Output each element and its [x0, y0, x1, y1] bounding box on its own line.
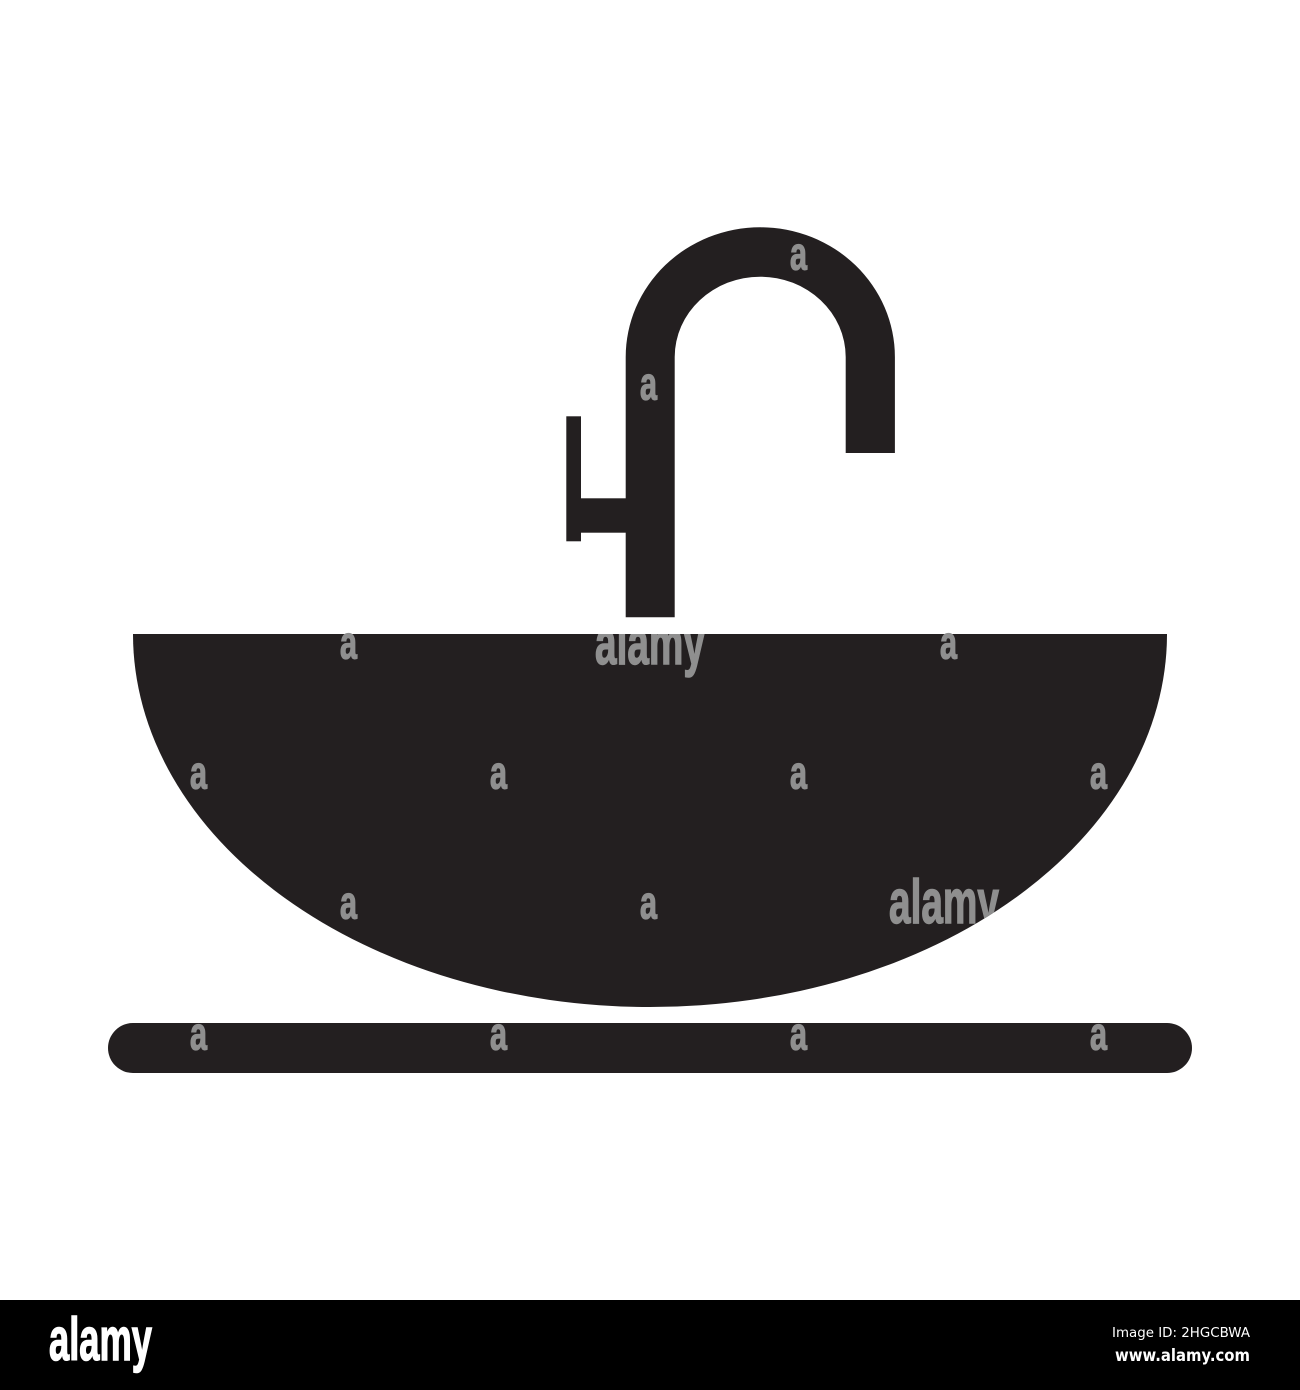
watermark letters: a [640, 876, 657, 928]
watermark words [596, 634, 1000, 924]
watermark letters: a [790, 746, 807, 798]
watermark words: alamy [889, 868, 999, 937]
watermark letters: a [640, 358, 657, 410]
watermark letters: a [1090, 1008, 1107, 1060]
watermark letters: a [340, 876, 357, 928]
footer bar [0, 1300, 1300, 1390]
watermark letters: a [490, 746, 507, 798]
faucet spout [626, 227, 895, 617]
watermark letters: a [1090, 746, 1107, 798]
watermark words: alamy [595, 609, 705, 678]
watermark letters: a [790, 228, 807, 280]
faucet handle grip [566, 416, 581, 541]
icon: faucet [566, 227, 895, 617]
watermark letters: a [190, 746, 207, 798]
footer logo: alamy [49, 1306, 152, 1373]
icon: sink counter bar [108, 1023, 1192, 1073]
website address: www.alamy.com [1115, 1346, 1250, 1366]
watermark letters: a [940, 616, 957, 668]
watermark letters [190, 228, 1107, 1060]
watermark letters: a [790, 1008, 807, 1060]
image id: Image ID: 2HGCBWA [1112, 1326, 1250, 1341]
faucet handle stem [580, 498, 627, 533]
watermark letters: a [490, 1008, 507, 1060]
watermark letters: a [340, 616, 357, 668]
icon: sink basin [133, 634, 1167, 1007]
watermark letters: a [190, 1008, 207, 1060]
